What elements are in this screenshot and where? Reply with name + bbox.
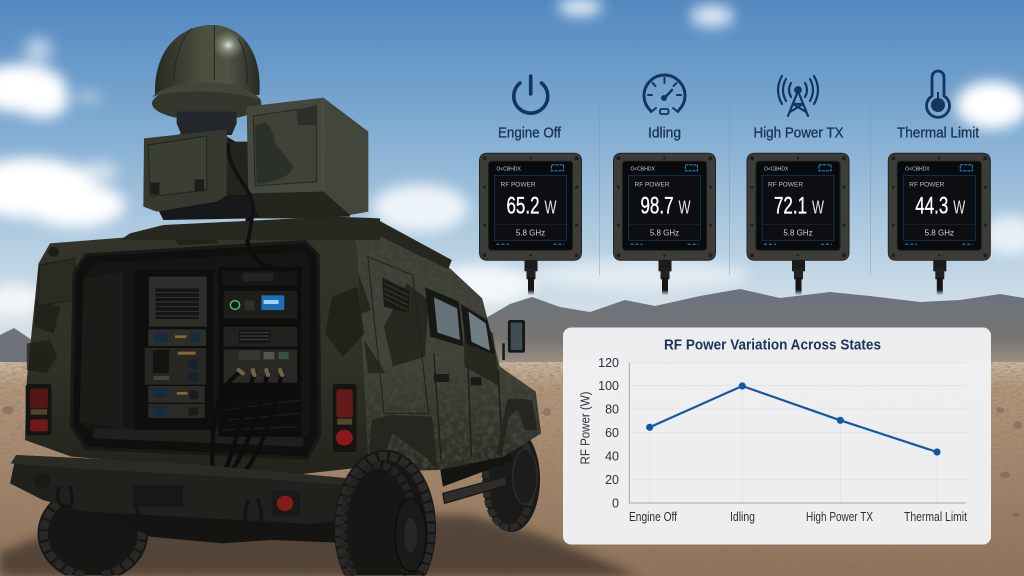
x-axis category labels bbox=[629, 509, 967, 524]
display device: Thermal Limit 44.3 W: 5.8 GHz bbox=[925, 228, 954, 237]
icon: power symbol bbox=[514, 76, 548, 113]
x-axis category labels: Idling bbox=[730, 509, 755, 524]
display device: Idling 98.7 W: W bbox=[678, 197, 690, 217]
left rear wheel bbox=[38, 485, 148, 575]
display device: High Power TX 72.1 W: 5.8 GHz bbox=[783, 228, 813, 237]
display device: High Power TX 72.1 W: O<CBHDX bbox=[764, 166, 789, 172]
side step bbox=[443, 477, 507, 503]
y-axis tick labels bbox=[598, 356, 619, 510]
left tail lights bbox=[26, 384, 51, 435]
display device: Thermal Limit 44.3 W bbox=[888, 153, 990, 295]
cable from turret into rack bbox=[247, 200, 288, 272]
near rear wheel bbox=[334, 415, 438, 575]
display device: Idling 98.7 W: RF POWER bbox=[634, 181, 670, 188]
chart axes bbox=[629, 363, 966, 503]
y-axis tick labels: 40 bbox=[605, 450, 619, 464]
roof-mounted radome turret and equipment boxes bbox=[120, 25, 380, 240]
display device: Idling 98.7 W: 5.8 GHz bbox=[650, 228, 679, 237]
rear compartment opening bbox=[71, 242, 320, 458]
data line with markers bbox=[646, 382, 941, 456]
state label: Thermal Limit: Thermal Limit bbox=[897, 124, 980, 142]
rear bumper with shackles and tow hitch bbox=[10, 455, 366, 528]
display device: Thermal Limit 44.3 W: 44.3 bbox=[915, 192, 948, 219]
y-axis tick labels: 120 bbox=[598, 356, 619, 370]
equipment rack: left column bbox=[135, 270, 214, 430]
display device: High Power TX 72.1 W: 72.1 bbox=[774, 192, 807, 219]
front wheel bbox=[483, 427, 540, 532]
display device: High Power TX 72.1 W bbox=[747, 153, 849, 295]
display device: Engine Off 65.2 W: RF POWER bbox=[500, 181, 536, 188]
x-axis category labels: Engine Off bbox=[629, 509, 677, 524]
display device: High Power TX 72.1 W: RF POWER bbox=[768, 181, 803, 188]
state label: Engine Off: Engine Off bbox=[498, 124, 562, 142]
y-axis title: RF Power (W) bbox=[578, 392, 592, 464]
icon: radio transmission tower bbox=[778, 76, 818, 116]
display device: Engine Off 65.2 W bbox=[480, 153, 582, 295]
display device: Thermal Limit 44.3 W: RF POWER bbox=[909, 181, 945, 188]
dark machinery between the boxes bbox=[157, 133, 350, 220]
chart title: RF Power Variation Across States bbox=[664, 338, 881, 354]
display device: Engine Off 65.2 W: 65.2 bbox=[506, 192, 540, 219]
divider lines between states bbox=[600, 80, 870, 275]
chassis underside bbox=[86, 507, 357, 543]
display device: Idling 98.7 W bbox=[614, 153, 716, 295]
y-axis tick labels: 20 bbox=[605, 473, 619, 487]
y-axis tick labels: 100 bbox=[598, 379, 619, 393]
display device: Engine Off 65.2 W: O<CBHDX bbox=[496, 166, 521, 172]
display device: High Power TX 72.1 W: W bbox=[812, 197, 824, 217]
right tail lights bbox=[333, 384, 356, 452]
radome dome bbox=[152, 25, 262, 121]
display device: Engine Off 65.2 W: 5.8 GHz bbox=[516, 228, 545, 237]
icon: speedometer gauge bbox=[644, 75, 685, 114]
display device: Idling 98.7 W: 98.7 bbox=[640, 192, 674, 219]
display device: Thermal Limit 44.3 W: W bbox=[953, 197, 965, 217]
turret neck bbox=[177, 112, 237, 135]
rear body panel bbox=[25, 220, 369, 475]
display device: Thermal Limit 44.3 W: O<CBHDX bbox=[905, 166, 930, 172]
x-axis category labels: High Power TX bbox=[806, 509, 873, 524]
display device: Engine Off 65.2 W: W bbox=[544, 197, 556, 217]
display device: Idling 98.7 W: O<CBHDX bbox=[630, 166, 655, 172]
equipment rack: right column bbox=[219, 267, 301, 437]
y-axis tick labels: 0 bbox=[612, 496, 619, 510]
icon: thermometer bbox=[926, 71, 949, 117]
left equipment box bbox=[143, 129, 250, 212]
vehicle: armoured truck seen from the rear bbox=[10, 200, 543, 575]
x-axis category labels: Thermal Limit bbox=[904, 509, 967, 524]
RF coaxial cables plugged into the rack bbox=[212, 370, 282, 472]
y-axis tick labels: 60 bbox=[605, 426, 619, 440]
mount plate bbox=[120, 217, 380, 240]
cable bbox=[228, 143, 253, 240]
right equipment box bbox=[247, 98, 368, 218]
vehicle side with windows and camouflage bbox=[339, 218, 543, 487]
state label: High Power TX: High Power TX bbox=[754, 124, 844, 142]
state label: Idling: Idling bbox=[648, 124, 681, 142]
chart gridlines bbox=[629, 363, 966, 503]
panel: RF power line chart bbox=[563, 328, 991, 544]
y-axis tick labels: 80 bbox=[605, 402, 619, 416]
